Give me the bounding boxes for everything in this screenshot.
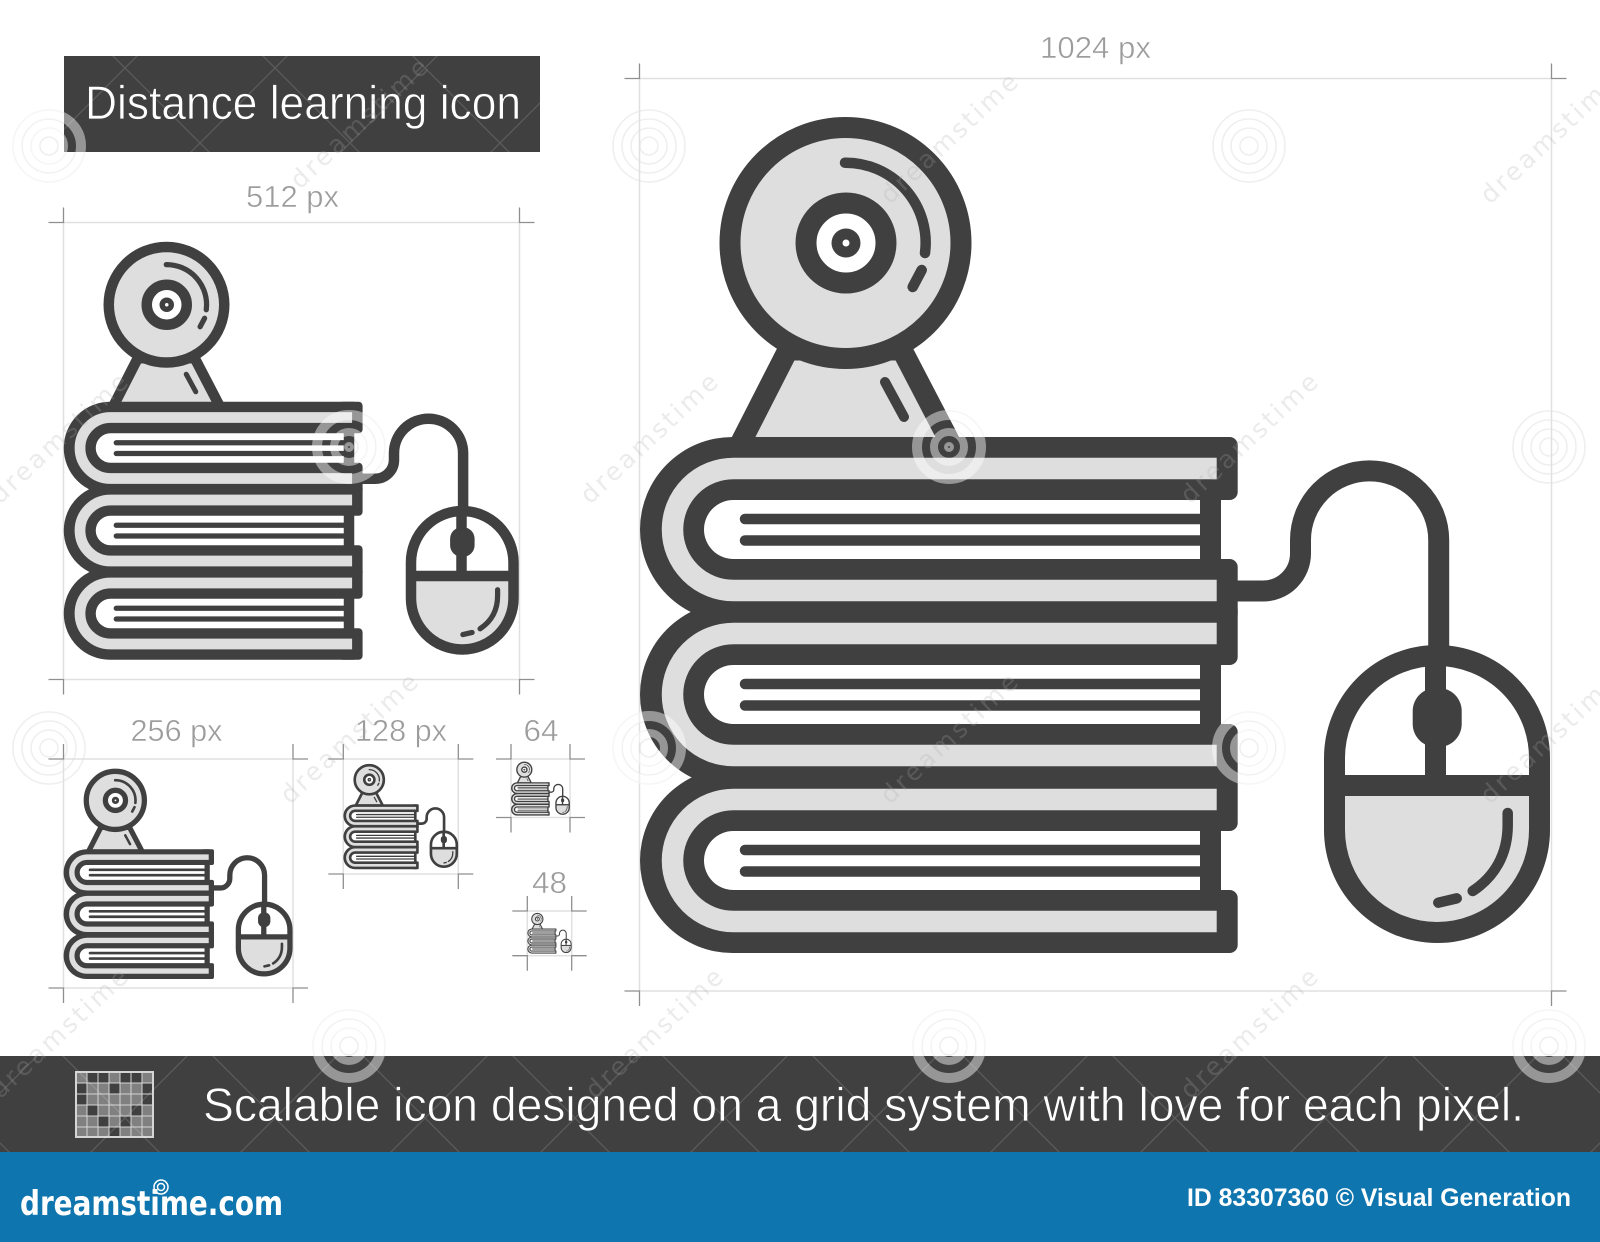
- frame: 512 px: 512 px: [246, 179, 339, 214]
- frame: 128 px: [328, 713, 473, 889]
- watermark spirals: [13, 110, 1585, 1082]
- icon: distance learning 48 px: [527, 913, 571, 954]
- icon: distance learning 64 px: [511, 762, 569, 816]
- frame: 256 px: [48, 713, 308, 1003]
- frame: 256 px: 256 px: [130, 713, 223, 748]
- watermark text: dreamstime: [1174, 365, 1326, 509]
- title banner: Distance learning icon: [85, 76, 521, 129]
- icon: distance learning 256 px: [64, 771, 290, 979]
- footer band: source bar: [0, 1152, 1600, 1242]
- icon: pixel grid: [76, 1072, 153, 1137]
- frame: 48 px: 48: [532, 865, 567, 900]
- frame: 64 px: [496, 713, 585, 832]
- logo spiral: [154, 1180, 168, 1194]
- logo text: dreamstime.com: [20, 1184, 283, 1224]
- title banner: [64, 56, 540, 152]
- watermark text: dreamstime: [574, 365, 726, 509]
- frame: 48 px: [512, 865, 587, 971]
- icon: distance learning 512 px: [64, 247, 514, 660]
- watermark text: dreamstime: [274, 665, 426, 809]
- footer band: slogan: [0, 1056, 1600, 1152]
- watermark text: dreamstime: [874, 665, 1026, 809]
- icon: distance learning 128 px: [343, 765, 457, 869]
- frame: 1024 px: 1024 px: [1040, 30, 1151, 65]
- icon: distance learning 1024 px: [640, 128, 1540, 953]
- watermark text: dreamstime: [874, 65, 1026, 209]
- watermark text: dreamstime: [284, 50, 436, 194]
- footer band: slogan: Scalable icon designed on a grid system with love for each pixel.: [203, 1078, 1524, 1131]
- image id credit: ID 83307360 © Visual Generation: [1187, 1184, 1571, 1212]
- frame: 64 px: 64: [524, 713, 558, 748]
- watermark text: dreamstime: [1174, 960, 1326, 1104]
- watermark text: dreamstime: [579, 960, 731, 1104]
- frame: 512 px: [48, 179, 534, 694]
- frame: 128 px: 128 px: [355, 713, 447, 748]
